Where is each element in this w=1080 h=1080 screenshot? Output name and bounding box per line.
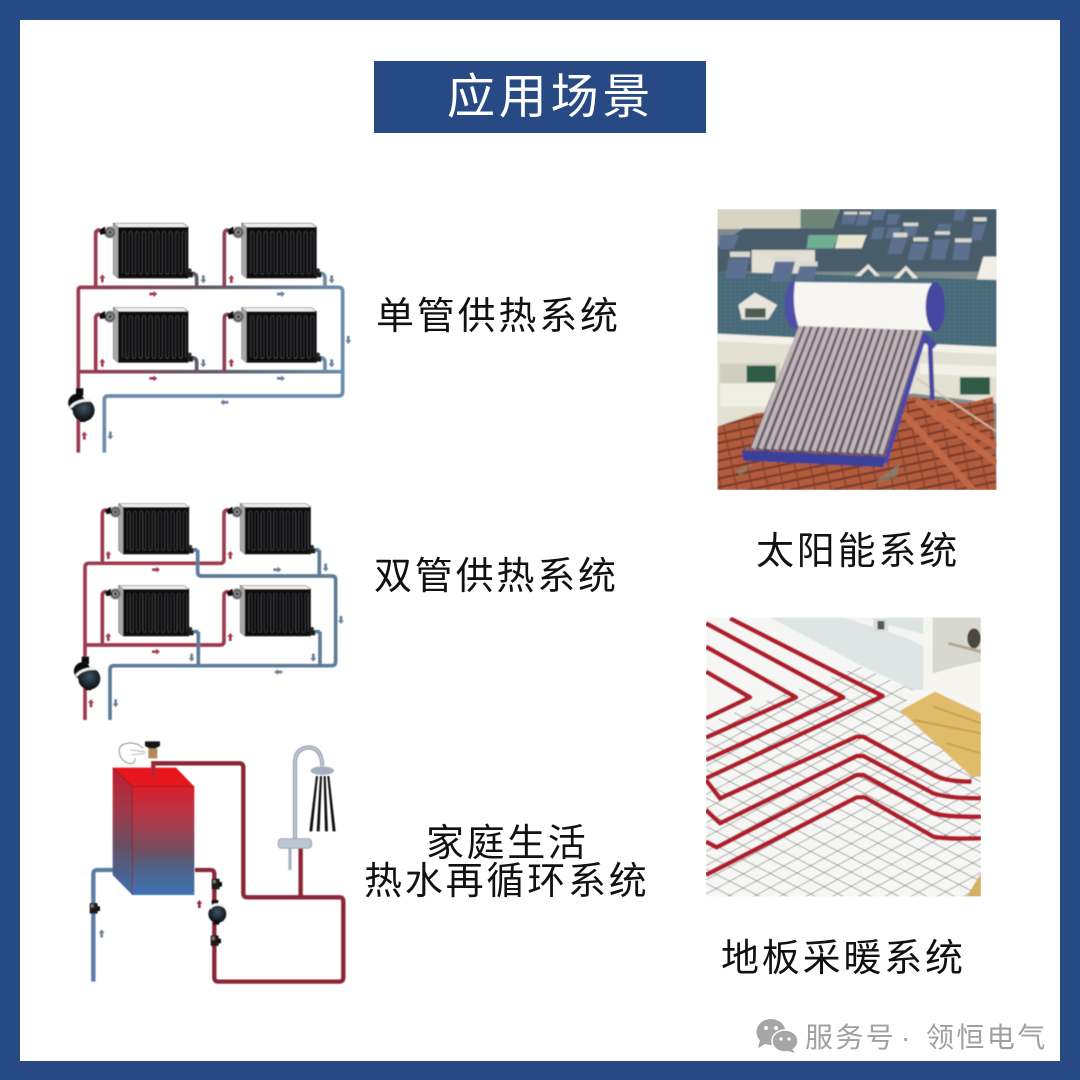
- label: domestic hot water recirculation: 家庭生活: [426, 823, 588, 865]
- watermark: 领恒电气: [926, 1022, 1048, 1053]
- title banner: [374, 61, 706, 133]
- photo: solar water heater: [717, 209, 997, 490]
- label: domestic hot water recirculation: 热水再循环系统: [364, 861, 650, 903]
- photo: floor heating: [706, 617, 981, 897]
- relief valve and steam: [119, 741, 160, 764]
- label: single-pipe heating: 单管供热系统: [376, 296, 621, 338]
- label: floor heating: 地板采暖系统: [721, 938, 966, 980]
- label: two-pipe heating: 双管供热系统: [374, 556, 619, 598]
- water tank: [113, 763, 194, 895]
- rooftop panels: [719, 209, 986, 282]
- dormers: [738, 293, 777, 319]
- frame: [885, 333, 925, 463]
- circulation pump: [208, 900, 226, 925]
- watermark: 服务号: [805, 1022, 896, 1053]
- diagram: domestic hot water recirculation: [90, 741, 343, 982]
- watermark: ·: [901, 1022, 910, 1053]
- icon: wechat logo: [756, 1019, 798, 1053]
- storage tank: [785, 281, 803, 329]
- vacuum tubes: [749, 324, 924, 456]
- shower: [278, 747, 336, 870]
- diagram: single-pipe heating system: [65, 223, 351, 453]
- title banner: 应用场景: [447, 71, 654, 124]
- diagram: two-pipe heating system: [71, 504, 344, 720]
- label: solar system: 太阳能系统: [756, 531, 960, 573]
- label: domestic hot water recirculation: [364, 823, 650, 903]
- watermark: [756, 1019, 1048, 1053]
